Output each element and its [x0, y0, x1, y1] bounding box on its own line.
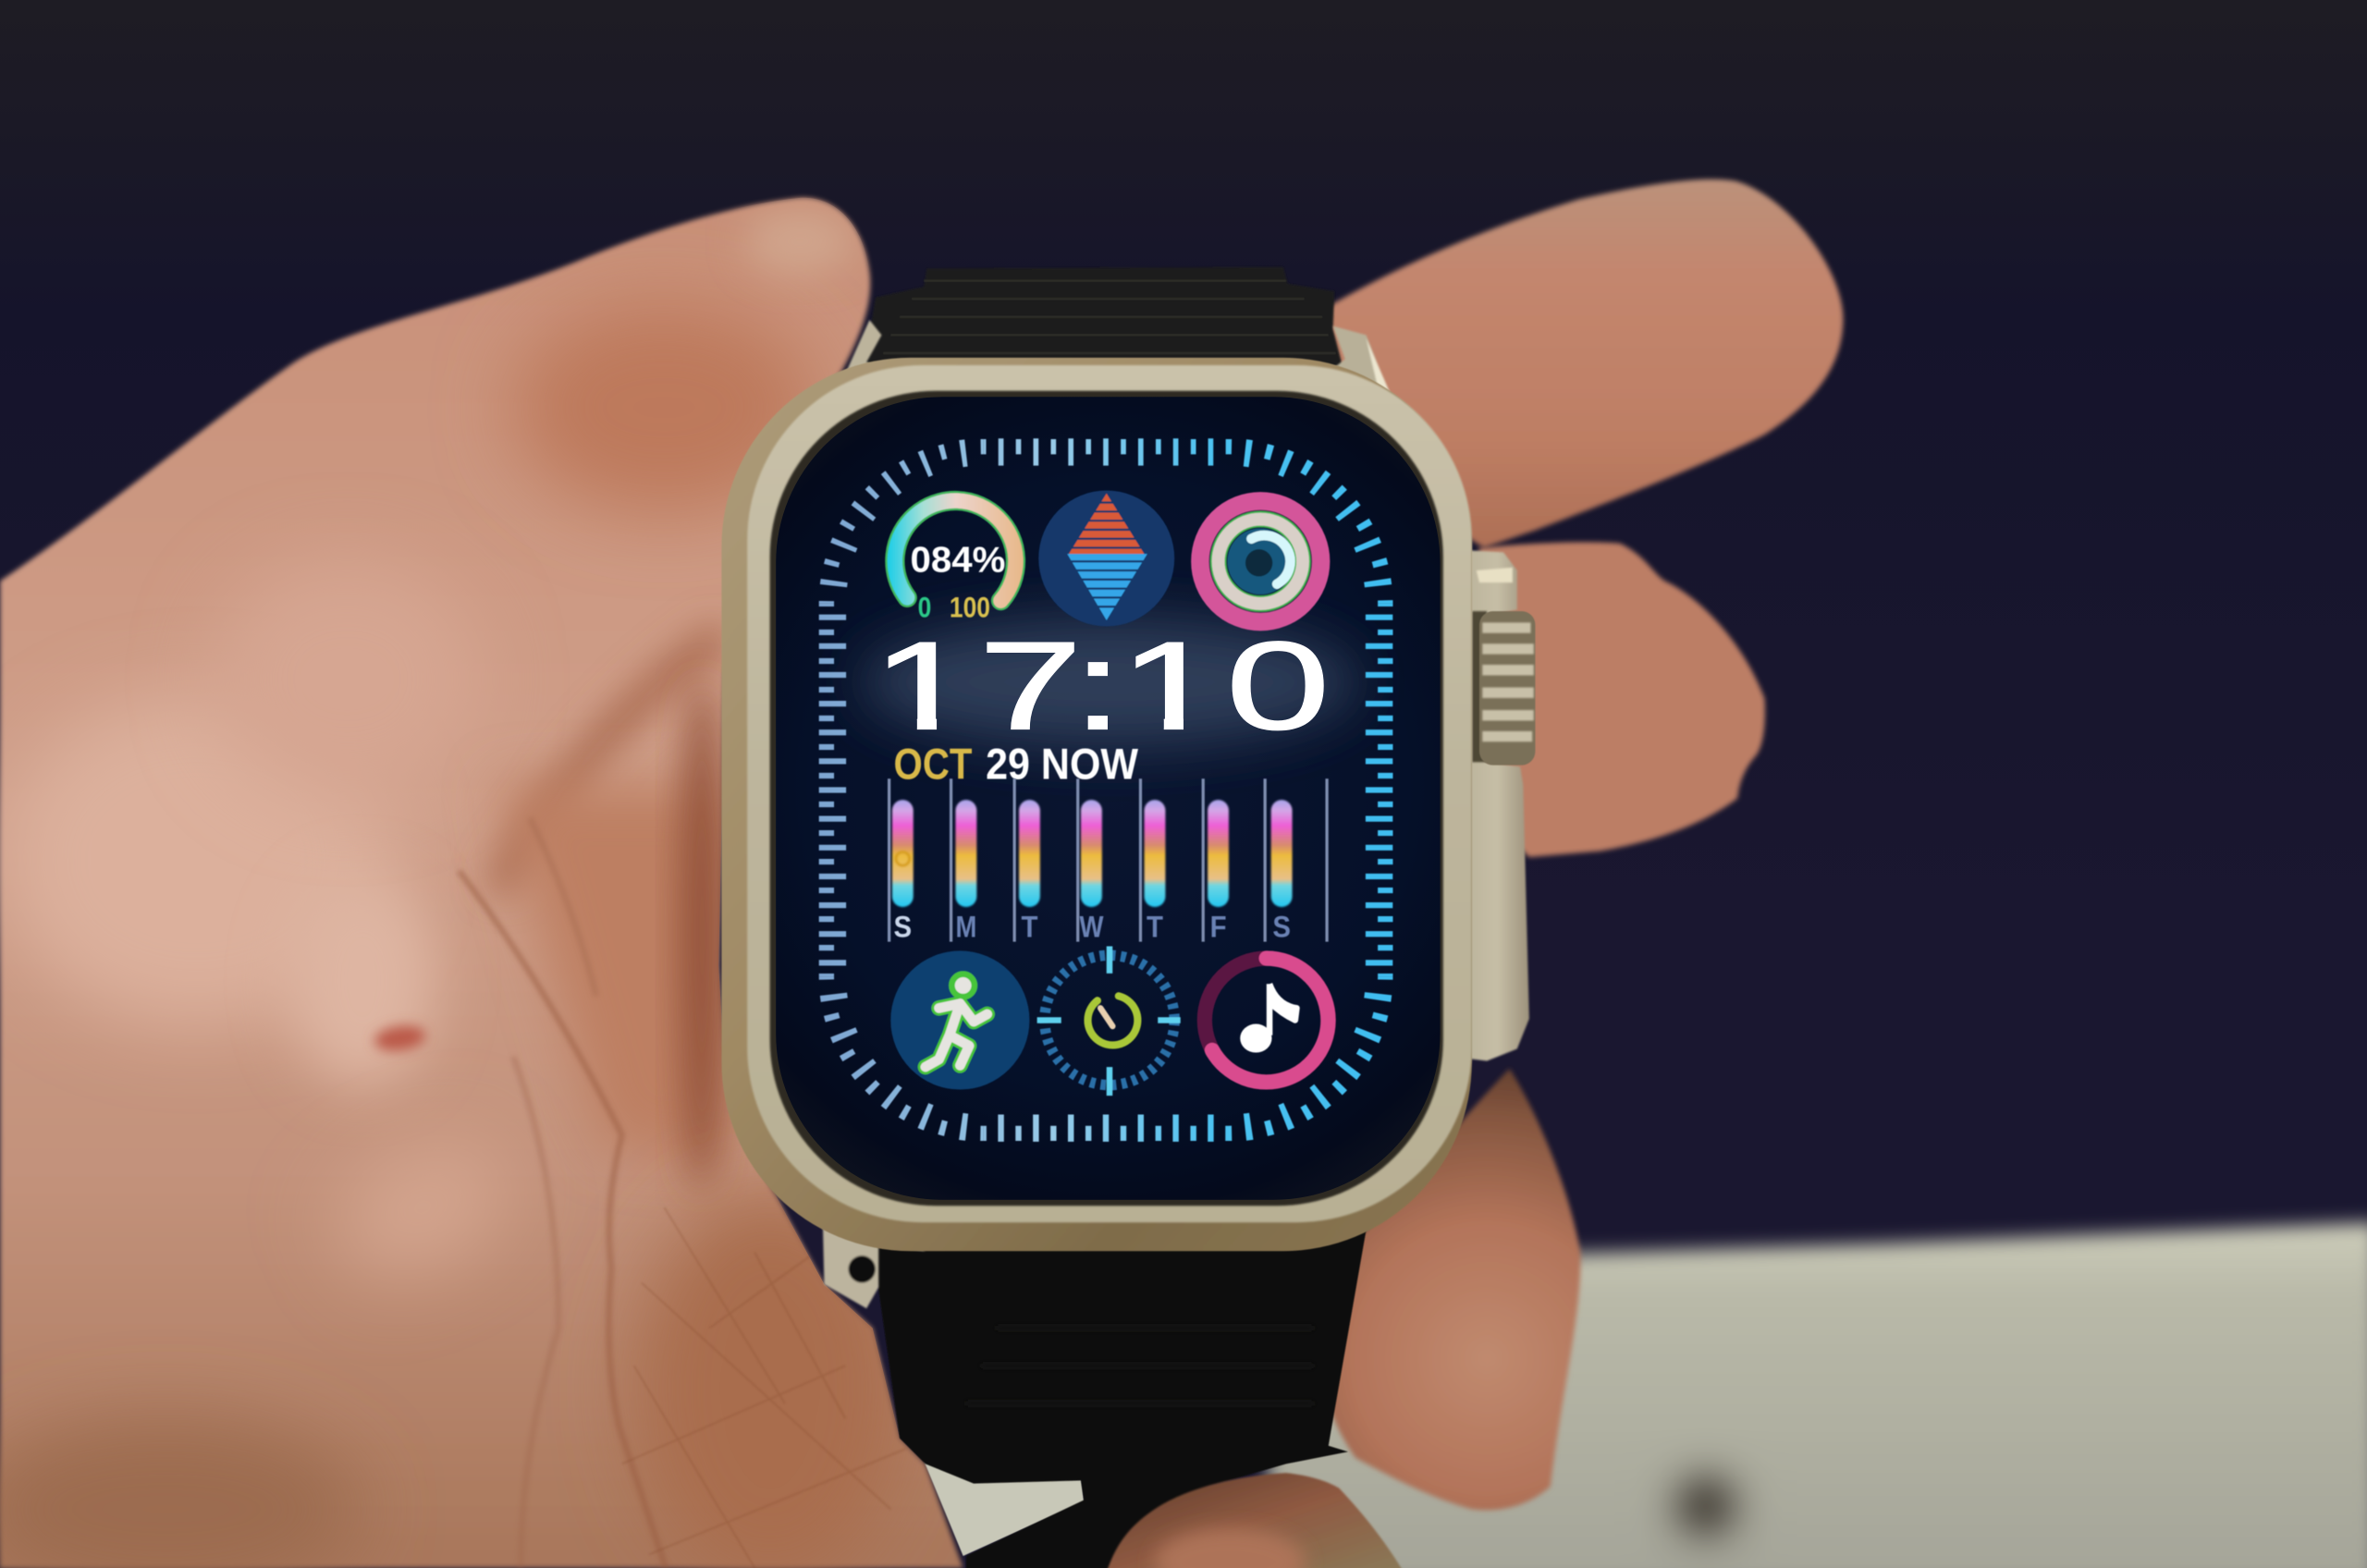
watch face: minute ticks ring: [827, 447, 1385, 1133]
weekly chart: day labels: S: [894, 910, 912, 944]
weekly chart: day labels: T: [1147, 910, 1163, 944]
strap: upper band: [864, 267, 1343, 370]
watch: titanium case: [721, 358, 1472, 1251]
background: pale table surface: [1268, 1222, 2367, 1568]
weekly chart: day labels: S: [1272, 910, 1291, 944]
complication: battery gauge: 084%: [910, 541, 1005, 581]
complication: battery gauge: 100: [950, 592, 990, 624]
finger: lower finger holding watch: [1324, 1069, 1580, 1510]
weekly chart: day labels: [894, 910, 1291, 944]
weekly chart: day labels: T: [1021, 910, 1038, 944]
weekly chart: day labels: F: [1210, 910, 1227, 944]
complication: compass elevation diamond: [1038, 491, 1174, 626]
complication: activity rings: [1200, 501, 1321, 622]
finger: bottom fingertip: [1107, 1473, 1404, 1568]
weekly chart: gradient bars: [892, 800, 1293, 907]
finger: index finger behind watch: [1298, 179, 1844, 548]
complication: battery gauge: 0: [918, 592, 931, 624]
background patch below the strap: [924, 1461, 1084, 1556]
time display: 17:10: [871, 616, 1331, 755]
watch: screen: [776, 397, 1441, 1200]
complication: workout runner: [890, 950, 1029, 1090]
complication: battery gauge: [895, 501, 1015, 624]
weekly chart: day labels: M: [955, 910, 976, 944]
weekly chart: day labels: W: [1079, 910, 1104, 944]
date line: [894, 740, 1138, 789]
complication: timer dial: [1037, 946, 1181, 1096]
weekly chart: day separators: [889, 778, 1327, 942]
date line: 29 NOW: [986, 740, 1138, 789]
watch: side crown guard and button housing: [1449, 549, 1535, 1061]
date line: OCT: [894, 740, 973, 789]
strap: lower band: [873, 1230, 1367, 1568]
hand: palm and thumb: [0, 198, 963, 1568]
complication: music ring and note: [1205, 959, 1329, 1082]
watch: lugs: [782, 320, 1419, 1308]
finger: middle finger behind watch: [1449, 542, 1765, 857]
